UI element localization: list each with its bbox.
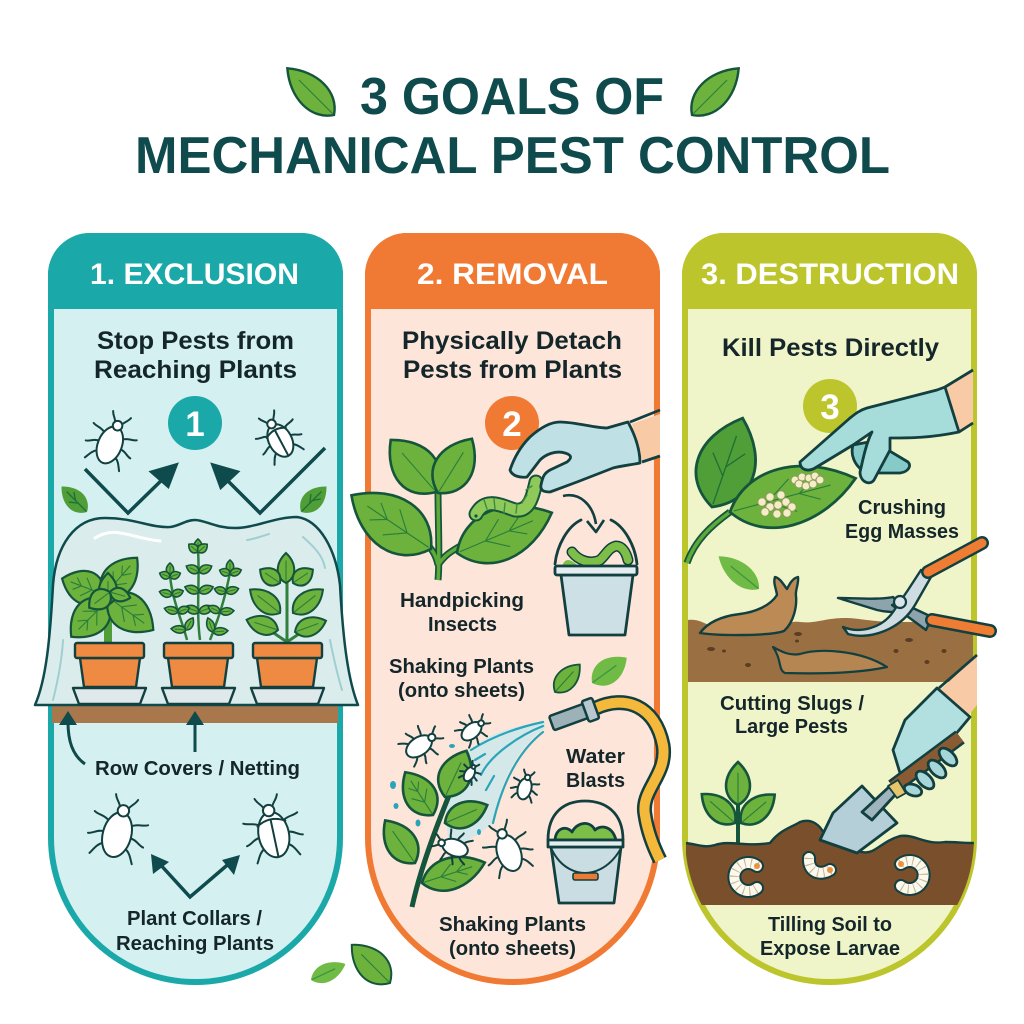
title: 3 GOALS OF (360, 68, 664, 126)
panel: exclusion (35, 233, 358, 982)
label: tilling soil: Expose Larvae (760, 937, 900, 960)
icon: small leaf right (294, 480, 333, 519)
text: exclusion goal (94, 327, 297, 384)
label: shaking plants bottom: (onto sheets) (449, 937, 576, 960)
label: handpicking (400, 589, 524, 636)
number badge 1: 1 (185, 405, 205, 444)
text: removal goal (402, 327, 622, 384)
text: destruction goal: Kill Pests Directly (722, 334, 939, 362)
text: exclusion goal: Stop Pests from (97, 327, 294, 355)
number badge 2: 2 (502, 405, 522, 444)
larvae grubs (734, 858, 924, 891)
label: water blasts (566, 745, 625, 792)
icon: title leaf left (277, 58, 345, 126)
arrows: deflected pests top (85, 448, 325, 513)
plant: broad leaf herb (244, 553, 329, 642)
icon: bug bottom right (238, 791, 307, 865)
bucket with handle (548, 801, 623, 903)
label: water blasts: Blasts (566, 769, 625, 792)
shelf (52, 705, 338, 723)
sprayed plant (373, 744, 492, 907)
heading: 3. Destruction: 3. DESTRUCTION (701, 258, 959, 291)
panel header: exclusion (48, 233, 343, 309)
panel: removal (337, 233, 664, 982)
soil mound with larvae (686, 821, 974, 905)
label: cutting slugs: Cutting Slugs / (720, 692, 864, 715)
plant: thyme (158, 539, 243, 640)
label: handpicking: Handpicking (400, 589, 524, 612)
heading: 1. Exclusion: 1. EXCLUSION (90, 258, 299, 291)
title (135, 68, 890, 185)
icon: small leaf left (55, 480, 94, 519)
pot 3 (251, 643, 324, 704)
pruning shears (838, 543, 990, 636)
panel header: removal (365, 233, 660, 309)
leaf branch with eggs (685, 409, 863, 563)
text: removal goal: Pests from Plants (403, 356, 622, 384)
label: plant collars (116, 907, 274, 955)
label: shaking plants: Shaking Plants (389, 655, 534, 678)
pot 1 (73, 643, 146, 704)
bugs knocked off (396, 708, 542, 880)
text: exclusion goal: Reaching Plants (94, 356, 297, 384)
egg masses (758, 472, 824, 518)
number badge 1 (168, 396, 222, 450)
gloved hand picking (510, 410, 660, 492)
curved arrow to bucket (563, 495, 604, 532)
caterpillar (474, 482, 536, 518)
label: tilling soil (760, 913, 900, 960)
label: tilling soil: Tilling Soil to (768, 913, 892, 936)
gloved finger crushing eggs (800, 370, 973, 483)
label: shaking plants (389, 655, 534, 702)
label: cutting slugs: Large Pests (735, 715, 848, 738)
label: plant collars: Plant Collars / (127, 907, 262, 930)
label: cutting slugs (720, 692, 864, 738)
panel: destruction (682, 233, 990, 982)
arrows: pointing to cover (59, 711, 204, 764)
heading: 2. Removal: 2. REMOVAL (417, 258, 608, 291)
title: MECHANICAL PEST CONTROL (135, 127, 890, 185)
pot 2 (162, 643, 235, 704)
number badge 2 (485, 396, 539, 450)
label: handpicking: Insects (428, 613, 497, 636)
icon: bottom leaf outlined (341, 934, 401, 994)
arrows: deflected pests bottom (151, 854, 240, 897)
label: shaking plants bottom (439, 913, 586, 960)
hose nozzle (549, 698, 599, 730)
sprout (694, 762, 782, 843)
label: crushing egg masses: Crushing (858, 496, 946, 519)
plant with leaves (337, 426, 562, 580)
label: row covers: Row Covers / Netting (95, 757, 300, 780)
icon: small leaf plain (585, 648, 634, 693)
label: shaking plants: (onto sheets) (398, 679, 525, 702)
slug in soil (773, 647, 887, 673)
label: shaking plants bottom: Shaking Plants (439, 913, 586, 936)
number badge 3: 3 (820, 388, 840, 427)
icon: title leaf right (681, 58, 749, 126)
label: plant collars: Reaching Plants (116, 932, 274, 955)
label: crushing egg masses (845, 496, 959, 543)
gloved hand holding trowel (888, 655, 977, 798)
icon: bottom leaf plain (307, 956, 349, 988)
bucket of caterpillars (555, 520, 637, 635)
hose (596, 703, 664, 860)
label: water blasts: Water (566, 745, 625, 768)
number badge 3 (803, 379, 857, 433)
icon: small leaf plain (712, 548, 766, 597)
text: removal goal: Physically Detach (402, 327, 622, 355)
soil spots (707, 632, 946, 667)
trowel (820, 786, 897, 853)
water spray (390, 722, 545, 850)
panel header: destruction (682, 233, 977, 309)
icon: bug bottom left (83, 790, 155, 866)
row cover dome (35, 517, 358, 705)
icon: small leaf outlined (548, 658, 587, 699)
icon: bug top left (80, 406, 144, 473)
label: crushing egg masses: Egg Masses (845, 520, 959, 543)
plant: basil (56, 547, 164, 649)
slug on soil (700, 577, 798, 635)
soil band (688, 618, 973, 682)
icon: bug top right (247, 404, 308, 467)
